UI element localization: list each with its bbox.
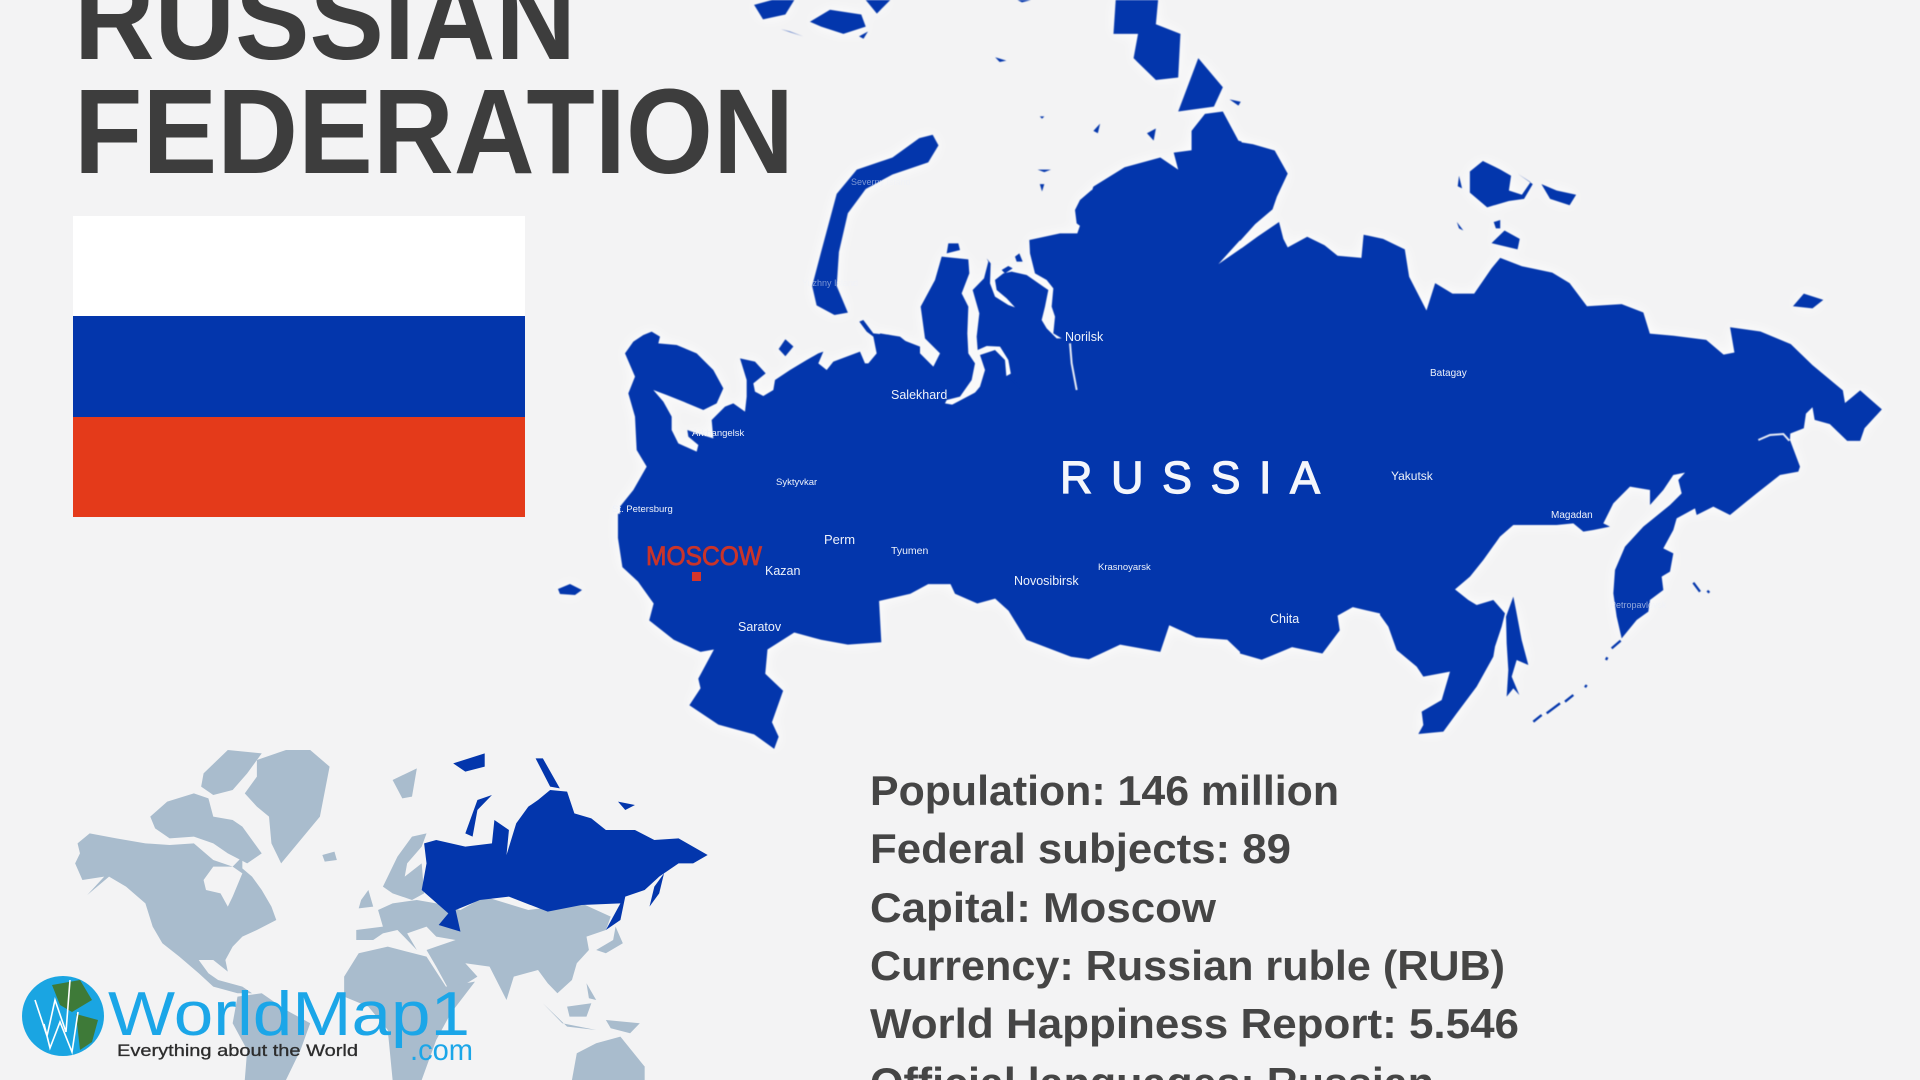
- facts text block: World Happiness Report: 5.546: [870, 1000, 1519, 1047]
- logo: WorldMap1: [22, 976, 473, 1067]
- Great Britain: [359, 890, 373, 908]
- Iceland: [322, 852, 337, 862]
- city labels: Krasnoyarsk: [1098, 562, 1151, 573]
- city labels: Norilsk: [1065, 330, 1104, 344]
- Yamal and Gydan peninsulas with Ob and Yenisei gulfs: [880, 190, 1120, 423]
- flag of Russia: [73, 216, 525, 517]
- facts text block: Capital: Moscow: [870, 884, 1216, 931]
- New Siberian Islands: [1457, 161, 1576, 249]
- logo wordmark: WorldMap1: [108, 980, 470, 1049]
- city labels: Kazan: [765, 564, 800, 578]
- northeastern Russia landmass: [1240, 142, 1882, 660]
- Svalbard: [393, 768, 417, 798]
- facts text block: Population: 146 million: [870, 767, 1339, 814]
- Greenland: [245, 750, 330, 863]
- Kaliningrad exclave: [558, 584, 582, 595]
- facts text block: Federal subjects: 89: [870, 825, 1291, 872]
- city labels: Petropavlovsk: [1610, 600, 1667, 610]
- city labels: Chita: [1270, 612, 1299, 626]
- country label: RUSSIA: RUSSIA: [1060, 452, 1320, 503]
- city labels: Severny Island: [851, 177, 911, 187]
- title: Russian Federation: [74, 0, 794, 199]
- city labels: Batagay: [1430, 368, 1467, 379]
- Wrangel Island: [1793, 294, 1823, 308]
- Indonesia and Philippines: [543, 983, 640, 1033]
- Scandinavia: [383, 833, 427, 900]
- logo domain: .com: [410, 1034, 473, 1067]
- city labels: Saratov: [738, 620, 782, 634]
- Australia: [572, 1037, 645, 1080]
- Canadian Arctic islands: [150, 793, 262, 863]
- city labels: Arkhangelsk: [692, 428, 745, 439]
- Africa: [344, 947, 475, 1080]
- title: Russian Federation: FEDERATION: [74, 63, 794, 199]
- Russia highlighted in blue: [422, 753, 708, 932]
- facts text block: Currency: Russian ruble (RUB): [870, 942, 1505, 989]
- North America: [75, 833, 276, 993]
- South America: [233, 993, 310, 1080]
- city labels: Yakutsk: [1391, 469, 1434, 483]
- city labels: Syktyvkar: [776, 477, 817, 488]
- city labels: [612, 177, 1667, 634]
- Hudson Bay cut-out: [204, 867, 242, 907]
- city labels: St. Petersburg: [612, 504, 673, 515]
- rest of the world in grey-blue: [75, 750, 645, 1080]
- Far East coast, Okhotsk Sea and Kamchatka: [1380, 363, 1800, 734]
- logo globe: [22, 976, 104, 1056]
- central and southern Russia landmass: [618, 111, 1242, 749]
- city labels: Salekhard: [891, 388, 947, 402]
- city labels: Tyumen: [891, 545, 929, 557]
- Kola, White Sea and Pechora coast: [620, 320, 920, 527]
- city labels: Yuzhny Island: [802, 278, 858, 288]
- city labels: Perm: [824, 532, 855, 547]
- Arctic islands and Novaya Zemlya: [754, 0, 1241, 356]
- capital label: Moscow: MOSCOW: [646, 541, 762, 571]
- facts text block: [870, 767, 1519, 1080]
- logo tagline: Everything about the World: [117, 1041, 358, 1060]
- world locator map: [75, 750, 708, 1080]
- city labels: Novosibirsk: [1014, 574, 1079, 588]
- Sakhalin: [1506, 597, 1528, 697]
- Europe and Asia: [356, 897, 611, 1000]
- city labels: Magadan: [1551, 510, 1593, 521]
- main map of Russia: [558, 0, 1882, 749]
- Japan: [596, 927, 623, 953]
- Kuril Islands: [1533, 583, 1709, 722]
